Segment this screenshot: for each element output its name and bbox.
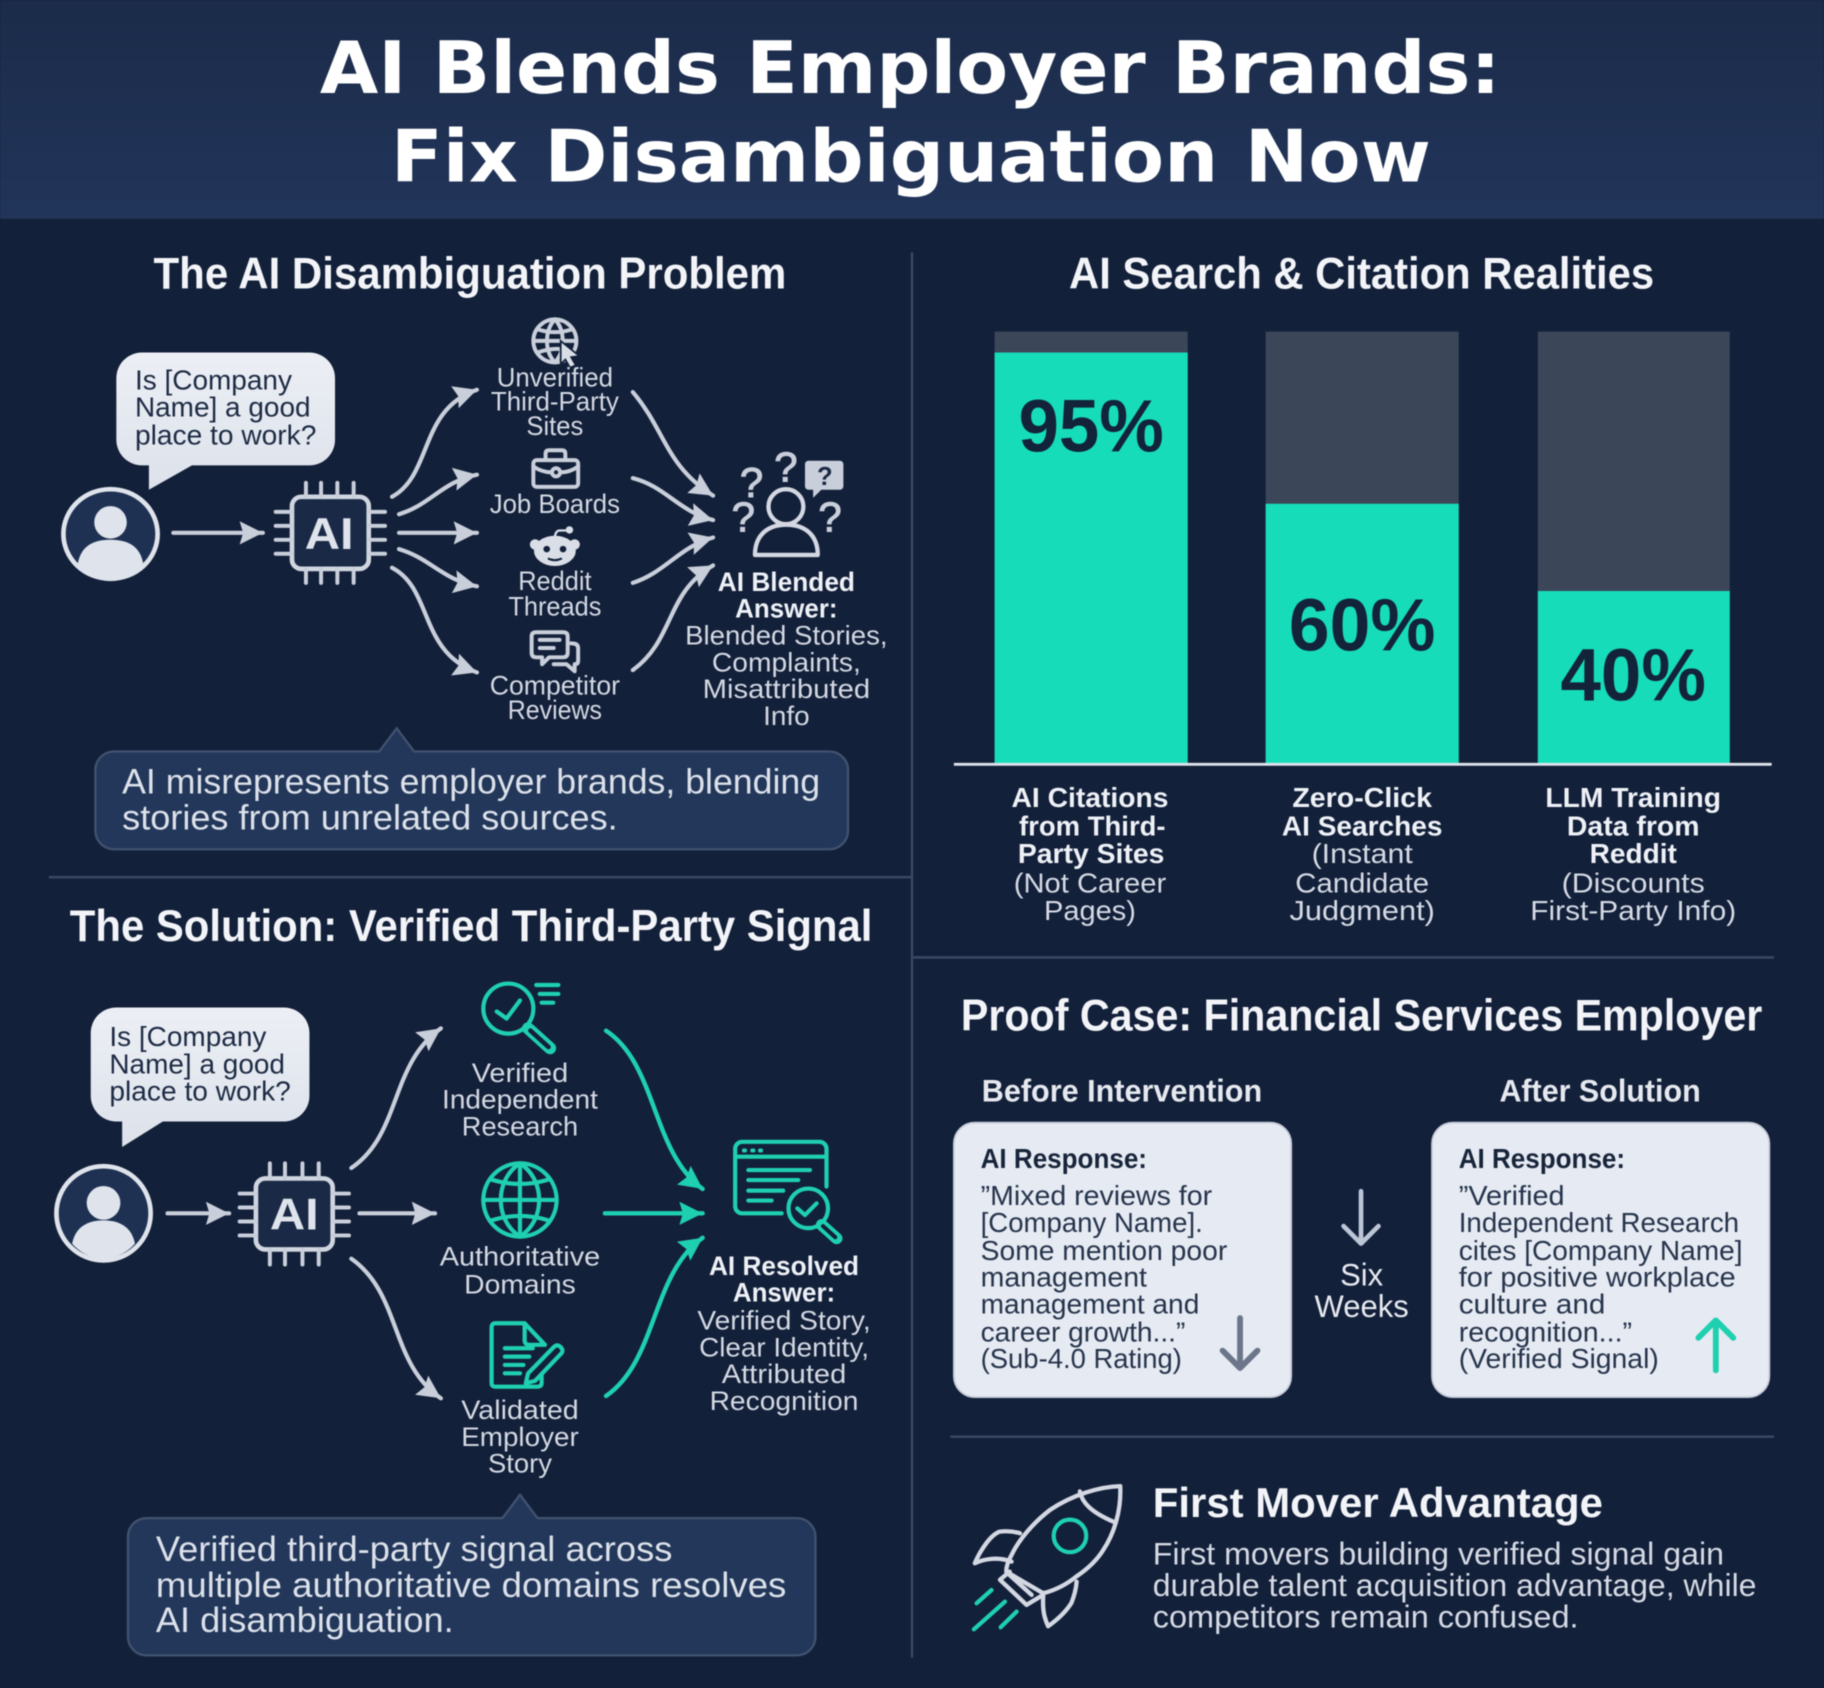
source: job boards: Job Boards [490, 489, 620, 519]
icon: AI chip [240, 1163, 349, 1265]
arrows: AI to sources [392, 390, 477, 672]
card: before [954, 1123, 1291, 1397]
label: LLM training data [1530, 782, 1736, 926]
card: before: management [981, 1262, 1147, 1293]
source: authoritative domains: Authoritative [440, 1242, 600, 1272]
card: before: AI Response: [981, 1143, 1147, 1174]
bar: 60 percent: 60% [1289, 583, 1435, 666]
source: competitor reviews [490, 632, 620, 725]
label: zero-click searches: Candidate [1295, 867, 1429, 898]
source: unverified third-party sites: Third-Party [491, 387, 619, 417]
text: AI blended answer: Misattributed [703, 674, 870, 704]
card: before: management and [981, 1288, 1199, 1319]
title: Fix Disambiguation Now [391, 116, 1431, 200]
callout: solution summary [128, 1495, 815, 1655]
card: after: ”Verified [1459, 1180, 1565, 1211]
arrows: AI to verified sources [351, 1028, 441, 1398]
text: AI resolved answer [697, 1251, 871, 1416]
icon: confused person: ? [740, 459, 763, 506]
callout: solution summary: AI disambiguation. [156, 1601, 454, 1640]
icon: resolved answer window [735, 1142, 837, 1238]
panel: proof case [954, 992, 1769, 1397]
bar: 95 percent [995, 332, 1188, 764]
text: AI resolved answer: Answer: [733, 1278, 835, 1308]
arrow and label: six weeks: Weeks [1314, 1289, 1409, 1324]
icon: confused person: ? [817, 463, 833, 491]
callout: solution summary: Verified third-party signal across [156, 1530, 672, 1569]
source: competitor reviews: Competitor [490, 671, 620, 701]
card: before: ”Mixed reviews for [981, 1180, 1212, 1211]
text: AI blended answer [685, 567, 888, 731]
source: unverified third-party sites [491, 319, 619, 441]
arrow: rating down [1223, 1318, 1257, 1368]
text: first mover description: First movers building verified signal gain [1153, 1537, 1724, 1572]
label: zero-click searches: (Instant [1312, 838, 1413, 869]
text: first mover description: durable talent acquisition advantage, while [1153, 1568, 1757, 1603]
label: AI citations: Pages) [1044, 895, 1136, 926]
speech bubble: question: place to work? [135, 419, 316, 450]
text: first mover description [1153, 1537, 1757, 1634]
label: AI citations: Party Sites [1018, 838, 1164, 869]
bar chart [954, 332, 1772, 926]
subheading: before: Before Intervention [982, 1074, 1262, 1109]
subheading: after: After Solution [1499, 1074, 1701, 1109]
speech bubble: question: Is [Company [135, 365, 292, 396]
label: AI citations [1011, 782, 1168, 926]
arrows: sources to blended answer [633, 392, 713, 670]
callout: problem summary [95, 728, 848, 849]
icon: AI chip [276, 483, 385, 583]
card: before: [Company Name]. [981, 1207, 1203, 1238]
label: LLM training data: LLM Training [1545, 782, 1721, 813]
card: after [1432, 1123, 1769, 1397]
icon: AI chip: AI [305, 510, 354, 559]
callout: problem summary: stories from unrelated sources. [122, 798, 618, 837]
label: LLM training data: First-Party Info) [1530, 895, 1736, 926]
text: AI resolved answer: Recognition [710, 1386, 858, 1416]
source: unverified third-party sites: Unverified [497, 362, 613, 392]
source: reddit threads: Threads [508, 591, 601, 621]
label: zero-click searches [1282, 782, 1442, 926]
text: AI blended answer: Complaints, [712, 647, 861, 677]
text: AI resolved answer: Attributed [722, 1359, 846, 1389]
source: authoritative domains [440, 1163, 600, 1300]
title [320, 27, 1501, 200]
heading: first mover advantage: First Mover Advantage [1153, 1479, 1603, 1526]
bar: 95 percent: 95% [1018, 384, 1164, 467]
source: unverified third-party sites: Sites [526, 411, 583, 441]
callout: solution summary: multiple authoritative domains resolves [156, 1566, 786, 1605]
bar: 60 percent [1266, 332, 1459, 764]
card: after: recognition...” [1459, 1316, 1632, 1347]
panel: AI search and citation realities [954, 250, 1772, 926]
label: AI citations: AI Citations [1011, 782, 1169, 813]
icon: confused person: ? [774, 444, 798, 491]
card: after: AI Response: [1459, 1143, 1625, 1174]
icon: rocket [974, 1486, 1120, 1629]
speech bubble: question: Name] a good [135, 392, 311, 423]
source: authoritative domains: Domains [464, 1270, 576, 1300]
icon: confused person [732, 444, 843, 555]
text: first mover description: competitors remain confused. [1153, 1599, 1579, 1634]
source: validated employer story: Story [488, 1449, 553, 1479]
source: validated employer story: Validated [461, 1395, 579, 1425]
source: validated employer story: Employer [461, 1422, 579, 1452]
source: validated employer story [461, 1323, 579, 1479]
label: AI citations: (Not Career [1014, 867, 1166, 898]
icon: confused person: ? [732, 494, 755, 541]
icon: confused person: ? [818, 494, 842, 541]
source: job boards [490, 450, 620, 519]
speech bubble: question: Name] a good [109, 1049, 285, 1080]
speech bubble: question: Is [Company [109, 1021, 266, 1052]
source: reddit threads [508, 526, 601, 621]
source: verified independent research: Verified [472, 1058, 568, 1088]
card: after: Independent Research [1459, 1207, 1739, 1238]
text: AI blended answer: Answer: [735, 594, 838, 624]
arrow and label: six weeks: Six [1340, 1257, 1383, 1292]
text: AI resolved answer: Clear Identity, [699, 1332, 869, 1362]
bar: 40 percent: 40% [1561, 633, 1706, 716]
title: AI Blends Employer Brands: [320, 27, 1501, 111]
text: AI resolved answer: AI Resolved [709, 1251, 859, 1281]
label: LLM training data: (Discounts [1562, 867, 1705, 898]
panel: the solution [56, 902, 872, 1655]
icon: user [63, 489, 158, 579]
source: reddit threads: Reddit [518, 566, 592, 596]
arrows: verified sources to resolved answer [605, 1031, 703, 1396]
text: AI blended answer: AI Blended [718, 567, 855, 597]
label: LLM training data: Data from [1567, 810, 1700, 841]
text: AI resolved answer: Verified Story, [697, 1306, 871, 1336]
arrow and label: six weeks [1314, 1191, 1409, 1324]
arrow: rating up [1698, 1320, 1733, 1370]
card: after: (Verified Signal) [1459, 1343, 1659, 1374]
source: competitor reviews: Reviews [508, 695, 602, 725]
panel: the AI disambiguation problem [63, 250, 888, 849]
card: after: culture and [1459, 1288, 1605, 1319]
speech bubble: question [91, 1007, 309, 1147]
arrow: user to AI [173, 531, 263, 535]
speech bubble: question: place to work? [109, 1076, 291, 1107]
label: AI citations: from Third- [1019, 810, 1166, 841]
speech bubble: question [116, 353, 335, 490]
label: zero-click searches: Judgment) [1289, 895, 1435, 926]
source: verified independent research [442, 984, 599, 1141]
label: zero-click searches: AI Searches [1282, 810, 1442, 841]
bar: 40 percent [1538, 332, 1730, 764]
heading: realities: AI Search & Citation Realities [1069, 250, 1654, 299]
icon: AI chip: AI [270, 1191, 319, 1240]
card: after: cites [Company Name] [1459, 1235, 1743, 1266]
arrow: user to AI [168, 1212, 229, 1215]
card: before: career growth...” [981, 1316, 1185, 1347]
source: verified independent research: Research [462, 1111, 578, 1141]
heading: problem: The AI Disambiguation Problem [154, 250, 786, 299]
source: verified independent research: Independent [442, 1085, 599, 1115]
text: AI blended answer: Blended Stories, [685, 620, 888, 650]
panel: first mover advantage [974, 1479, 1757, 1634]
card: before: Some mention poor [981, 1235, 1227, 1266]
heading: proof case: Proof Case: Financial Services Employer [961, 992, 1762, 1041]
card: before: (Sub-4.0 Rating) [981, 1343, 1182, 1374]
icon: user [56, 1166, 151, 1260]
label: zero-click searches: Zero-Click [1292, 782, 1432, 813]
heading: solution: The Solution: Verified Third-Party Signal [70, 902, 872, 951]
label: LLM training data: Reddit [1590, 838, 1677, 869]
callout: problem summary: AI misrepresents employer brands, blending [122, 762, 820, 801]
text: AI blended answer: Info [763, 701, 810, 731]
header banner [0, 0, 1824, 219]
card: after: for positive workplace [1459, 1262, 1736, 1293]
